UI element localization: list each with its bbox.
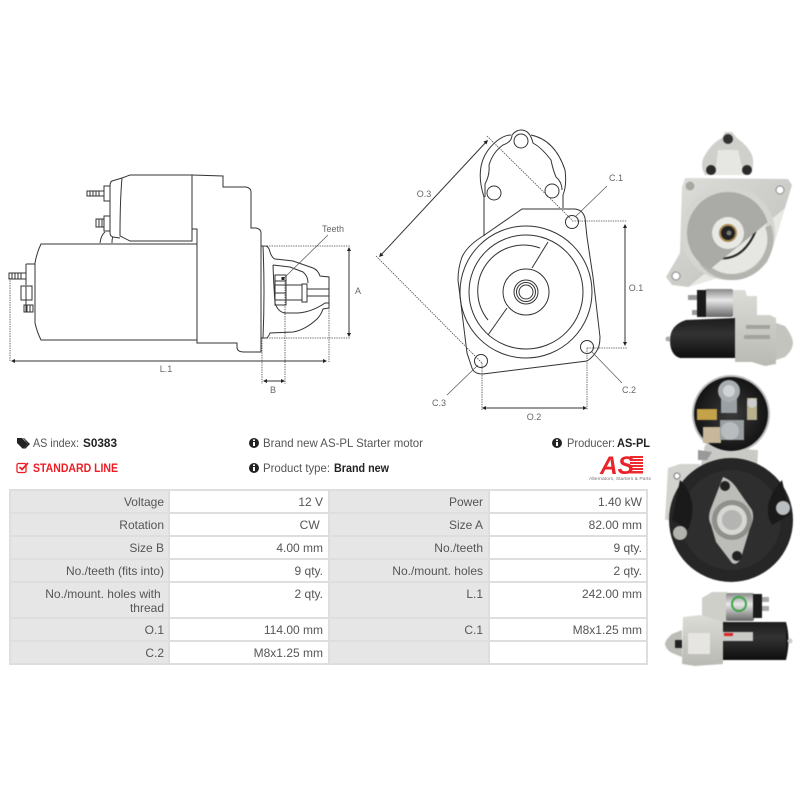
mounting flange [458,209,600,374]
row: teeth fits into / mount holes: No./mount. holes [392,564,483,578]
teeth callout [282,224,344,280]
row: mount holes with thread / L.1: thread [130,601,164,615]
icon: info [249,438,259,448]
row: O.1 / C.1: O.1 [145,623,164,637]
dimension B: B [270,385,276,395]
dimension L.1 [10,278,329,374]
row: Voltage / Power: 12 V [298,495,323,509]
row: mount holes with thread / L.1 [9,583,648,617]
row: teeth fits into / mount holes: No./teeth (fits into) [66,564,164,578]
pinion nose [261,246,329,338]
row: C.2 [9,642,648,665]
AS index line [17,436,117,450]
logo: AS-PL: Alternators, Starters & Parts [589,476,652,481]
specification table [9,489,648,665]
row: Size B / No./teeth: 4.00 mm [276,541,323,555]
row: Voltage / Power: Power [449,495,483,509]
row: Size B / No./teeth: No./teeth [434,541,483,555]
callout C.2 [592,352,636,395]
motor body [9,244,197,340]
logo: AS-PL [589,452,652,481]
icon: tags [17,438,30,449]
row: Voltage / Power: 1.40 kW [598,495,642,509]
dimension A: A [355,286,361,296]
dimension O.1: O.1 [629,283,643,293]
row: C.2: M8x1.25 mm [254,646,323,660]
rear bracket [480,130,566,236]
product type line: Product type: [263,461,330,475]
dimension O.2: O.2 [527,412,541,422]
brand new line: Brand new AS-PL Starter motor [263,436,423,450]
row: Rotation / Size A: 82.00 mm [589,518,642,532]
callout C.3: C.3 [432,398,446,408]
dimension B [262,280,285,395]
producer line: AS-PL [617,436,650,450]
dimension O.1 [572,221,643,348]
row: Voltage / Power [9,489,648,512]
row: O.1 / C.1: M8x1.25 mm [573,623,642,637]
row: O.1 / C.1: 114.00 mm [264,623,323,637]
row: Rotation / Size A: CW [300,518,320,532]
producer line: Producer: [567,436,615,450]
row: Voltage / Power: Voltage [124,495,164,509]
dimension A [262,246,361,338]
row: teeth fits into / mount holes [9,560,648,581]
icon: info [249,463,259,473]
drive end rings [460,226,592,358]
teeth callout: Teeth [322,224,344,234]
product type line [249,461,390,475]
row: mount holes with thread / L.1: 242.00 mm [582,587,642,601]
photo: front of starter [666,132,792,287]
photo: opposite side of starter [665,592,792,666]
row: Size B / No./teeth [9,537,648,558]
product photos [664,132,794,666]
standard line badge: STANDARD LINE [33,461,118,475]
producer line [552,436,650,450]
icon: red check box [17,463,28,472]
row: mount holes with thread / L.1: 2 qty. [295,587,323,601]
logo: AS-PL: AS [599,452,634,480]
icon: info [552,438,562,448]
callout C.1 [575,173,623,217]
product type line: Brand new [334,461,390,475]
drive housing [192,175,261,352]
row: Size B / No./teeth: Size B [129,541,164,555]
row: O.1 / C.1: C.1 [464,623,483,637]
dimension O.3 [376,136,572,363]
row: Rotation / Size A: Size A [449,518,483,532]
dimension O.2 [482,348,587,422]
row: Size B / No./teeth: 9 qty. [614,541,642,555]
callout C.2: C.2 [622,385,636,395]
row: mount holes with thread / L.1: L.1 [466,587,483,601]
photo: side of starter [666,289,793,366]
row: teeth fits into / mount holes: 9 qty. [295,564,323,578]
AS index line: S0383 [83,436,117,450]
row: Rotation / Size A [9,514,648,535]
row: Rotation / Size A: Rotation [119,518,164,532]
row: O.1 / C.1 [9,619,648,640]
row: C.2: C.2 [145,646,164,660]
dimension O.3: O.3 [417,189,431,199]
callout C.1: C.1 [609,173,623,183]
callout C.3 [432,365,478,408]
row: teeth fits into / mount holes: 2 qty. [614,564,642,578]
solenoid [87,175,192,243]
AS index line: AS index: [33,436,79,450]
photo: rear of starter [665,375,793,582]
row: mount holes with thread / L.1: No./mount. holes with [45,587,161,601]
dimension L.1: L.1 [160,364,172,374]
